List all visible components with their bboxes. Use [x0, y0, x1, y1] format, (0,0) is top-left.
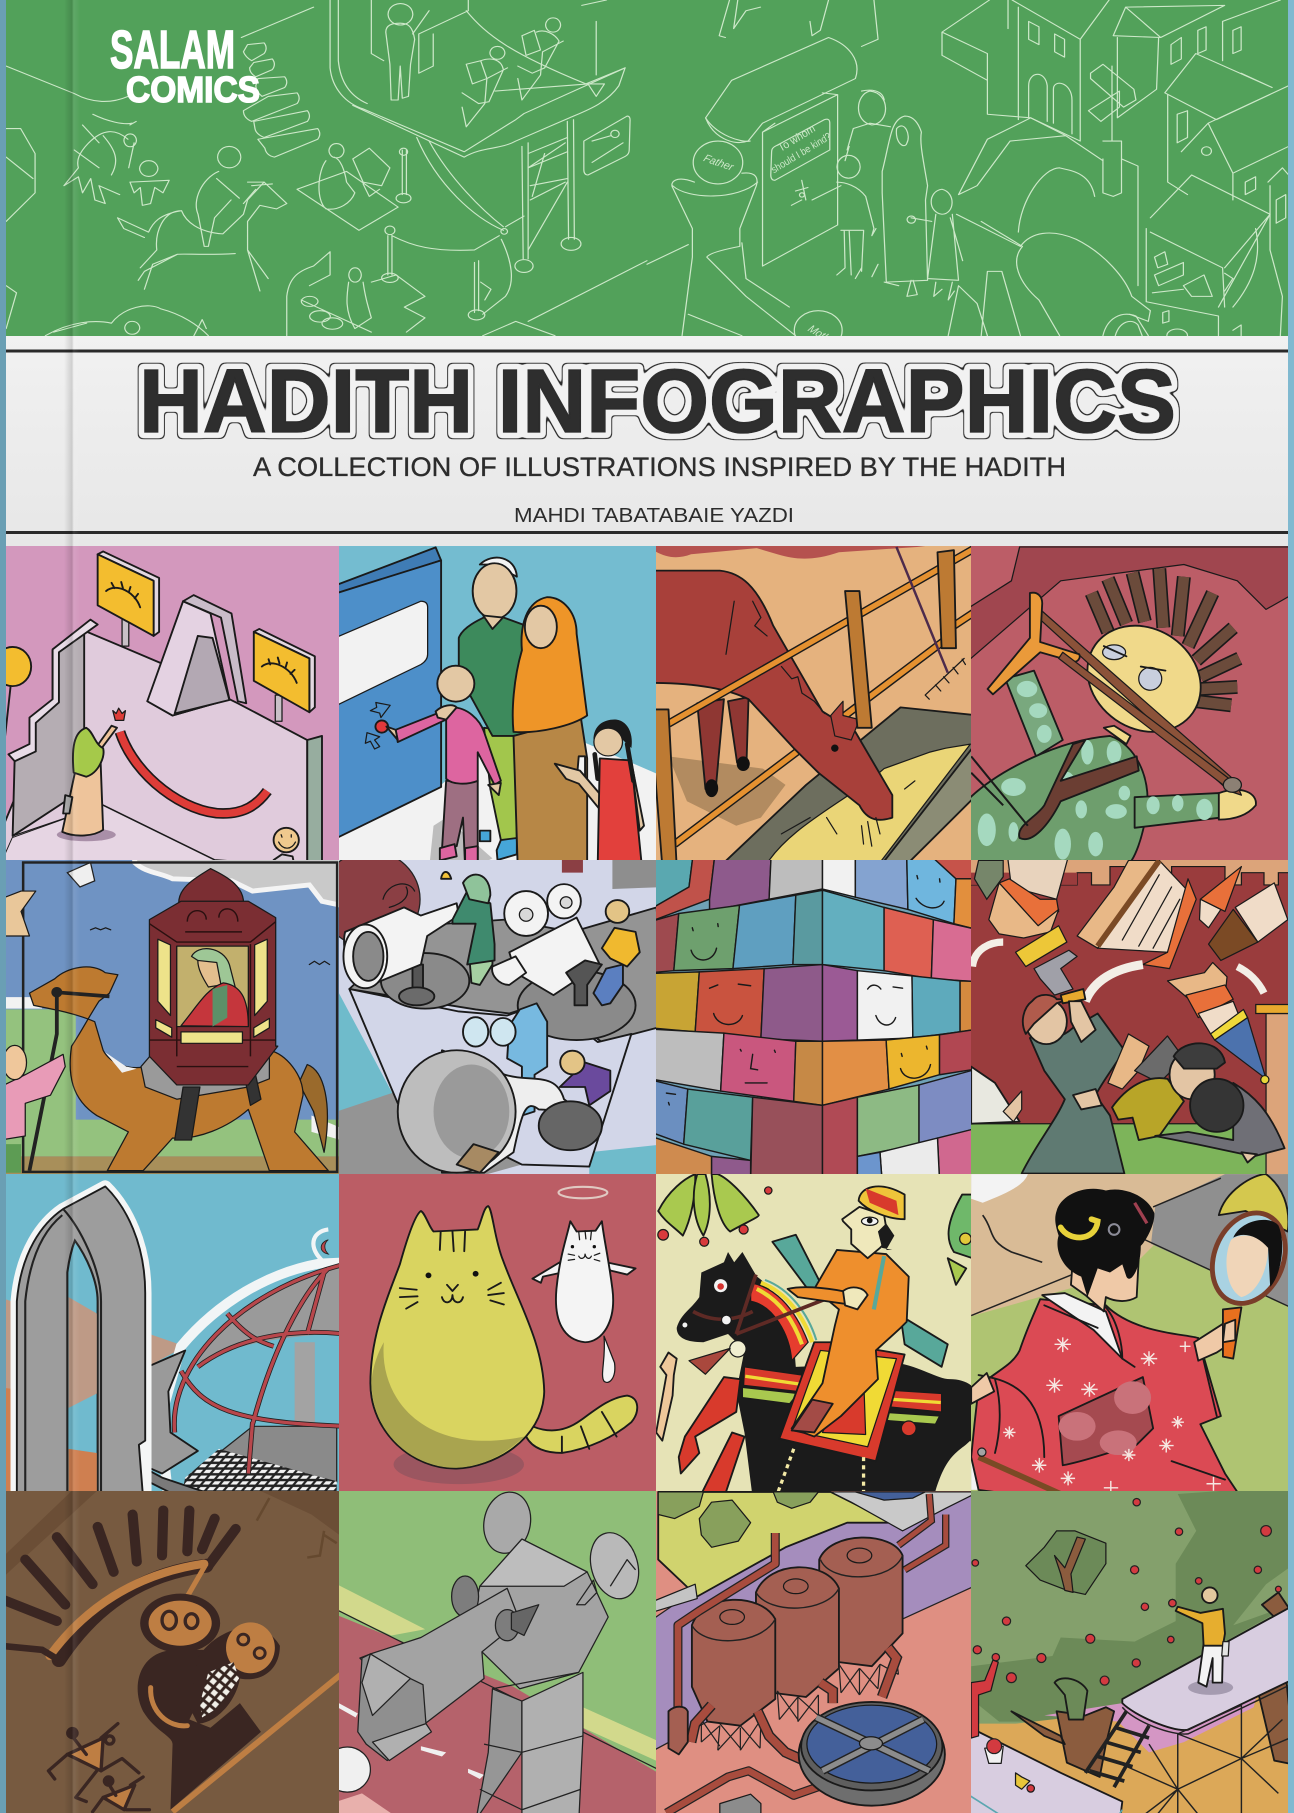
picker man: [1169, 1587, 1233, 1695]
line art: desk person: [287, 252, 371, 336]
subtitle: A COLLECTION OF ILLUSTRATIONS INSPIRED BY THE HADITH: [253, 452, 1066, 482]
panel: woman in kimono with mirror (row 3, col 4): [966, 1170, 1294, 1498]
line art: family: [845, 90, 928, 282]
line art: capsule box: [706, 37, 857, 143]
right column: [1266, 1014, 1294, 1181]
right wall edge: [307, 736, 322, 867]
mother figure: [138, 1594, 261, 1810]
ground: [966, 1683, 1294, 1813]
panel: yellow cat and angel cat (row 3, col 2): [337, 1170, 665, 1498]
mirror: [1196, 1174, 1294, 1359]
book background right: [1288, 0, 1294, 1813]
dome: [160, 1229, 349, 1498]
woman with ribbon: [57, 726, 117, 841]
panel: tanks and pipes (row 4, col 3): [650, 1486, 979, 1813]
falling tower centre: [1077, 860, 1196, 969]
line art: bridge: [956, 118, 1150, 336]
line art: horse and rider: [118, 146, 287, 291]
panel: green line-art header: [6, 0, 1289, 350]
film camera: [492, 884, 602, 1005]
apples: [972, 1498, 1281, 1685]
logo: Salam Comics: [110, 20, 260, 110]
smiling head: [274, 828, 299, 867]
telescope: [343, 903, 459, 1005]
saddle cloth and straps: [141, 1054, 269, 1140]
rake: [896, 547, 965, 699]
panel: wall of smiling bricks (row 2, col 3): [650, 854, 979, 1181]
sphere: father: [693, 141, 743, 184]
door: [337, 547, 441, 838]
panel: gray robot (row 4, col 2): [324, 1486, 665, 1813]
mother: [513, 597, 587, 867]
tank 1: [692, 1600, 775, 1726]
boy in pink: [386, 666, 501, 867]
body: [966, 736, 1256, 867]
teal man: [1022, 989, 1124, 1174]
book background left: [0, 0, 6, 1813]
horse: [650, 571, 892, 846]
line art: left half scene: [6, 0, 647, 336]
kimono: [971, 1293, 1241, 1498]
frame: [23, 862, 337, 1172]
fence lower rail: [675, 609, 979, 844]
headdress arc: [0, 1564, 206, 1660]
bucket and chick: [985, 1739, 1034, 1792]
darker tree canopy: [971, 1486, 1294, 1722]
brick faces: [666, 876, 944, 1105]
line art: right half scene: [647, 0, 1289, 350]
clouds: [135, 854, 341, 905]
panel: boy with slingshot (row 1, col 4): [966, 540, 1294, 867]
seated figure in yellow: [593, 900, 640, 1005]
line art: figure at screen: [297, 144, 398, 230]
bridle: [689, 1275, 841, 1374]
bricks behind: [1108, 1034, 1149, 1089]
label: mother: Mother: [805, 323, 841, 350]
feed trough: [720, 707, 979, 867]
ground: [966, 1124, 1294, 1181]
button with arrows: [365, 702, 390, 749]
green lawn: [658, 1492, 892, 1597]
side hand: [656, 1352, 677, 1441]
label: sign question second line: should I be kind?: [769, 131, 835, 176]
purple figure: [560, 1051, 610, 1105]
panel: arch and dome (row 3, col 1): [0, 1170, 349, 1498]
boy hair spikes: [1092, 569, 1239, 705]
cat tail: [526, 1396, 637, 1453]
panel: apple tree and platforms (row 4, col 4): [966, 1486, 1294, 1813]
panel: Rajput rider on black horse (row 3, col 3): [650, 1170, 979, 1498]
label: sign question: To whom: [775, 123, 818, 154]
falling tower left: [989, 854, 1077, 995]
raised arm: [1005, 671, 1063, 756]
line art: scaffold: [522, 120, 574, 259]
sign: closed eye left: [98, 551, 159, 646]
slingshot: [971, 593, 1241, 826]
man: [459, 558, 526, 860]
left person in background: [0, 891, 36, 936]
woman in howdah: [181, 949, 248, 1027]
saddle: [742, 1342, 942, 1461]
arm and hand: [1194, 1322, 1235, 1361]
howdah: [149, 869, 278, 1085]
panel: family pressing button (row 1, col 2): [337, 540, 673, 867]
line art: standing person top: [371, 0, 468, 100]
red figure: [971, 1660, 998, 1738]
tank 2: [756, 1567, 839, 1697]
gray platforms: [349, 907, 665, 1042]
trunk: [1011, 1592, 1294, 1777]
dancing figures: [48, 1724, 149, 1812]
decorated front leg: [679, 1377, 744, 1498]
quiver: [772, 1235, 948, 1367]
line art: curtain rope: [392, 137, 524, 314]
book spine shading: [64, 0, 80, 1813]
line art: seated readers: [462, 18, 563, 127]
panel: crumbling towers and figures (row 2, col 4): [966, 854, 1294, 1181]
obi sash: [1059, 1377, 1153, 1465]
panel: machines and figures (row 2, col 2): [321, 851, 665, 1181]
floor: [51, 1350, 202, 1498]
line art: houses right: [1165, 54, 1289, 200]
horn: [398, 1050, 602, 1173]
panel: cave painting figures (row 4, col 1): [0, 1490, 345, 1813]
left platform: [650, 1584, 697, 1613]
balloon: [6, 646, 32, 736]
panel: horse at fence (row 1, col 3): [650, 540, 979, 867]
tower piece right: [1167, 962, 1269, 1084]
robot: [358, 1488, 646, 1813]
halo: [559, 1187, 607, 1198]
leaves: [658, 1174, 772, 1246]
right plant: [949, 1195, 979, 1260]
letter-shaped wall arch: [147, 595, 246, 716]
title: HADITH INFOGRAPHICS: [139, 352, 1176, 452]
girl in red: [555, 720, 644, 867]
author: MAHDI TABATABAIE YAZDI: [514, 504, 794, 527]
diagonal ledge: [173, 1674, 341, 1812]
platforms: [966, 1605, 1294, 1813]
line art: bottom animal: [45, 306, 208, 336]
grass: [0, 1009, 345, 1156]
line art: tribal birds: [64, 114, 136, 204]
leader figure: [0, 1045, 65, 1173]
panel: woman on camel in howdah (row 2, col 1): [0, 854, 345, 1181]
line art: houses: [942, 0, 1109, 141]
logo: Salam Comics: COMICS: [126, 69, 260, 110]
round blue basin: [799, 1702, 945, 1806]
logo: Salam Comics: SALAM: [110, 20, 235, 80]
crescent finial: [313, 1229, 328, 1262]
panel: title band: [6, 336, 1288, 546]
angel cat: [532, 1221, 636, 1382]
red ribbon: [113, 708, 267, 813]
yellow cat: [370, 1206, 617, 1469]
tank legs: [701, 1658, 898, 1750]
black horse: [677, 1252, 979, 1498]
woman at telescope: [441, 872, 495, 985]
fence upper rail and posts: [650, 546, 979, 867]
kimono flowers: [1003, 1337, 1221, 1493]
baby figure: [189, 1622, 280, 1724]
sign: closed eye right: [254, 629, 315, 721]
headdress rays: [0, 1510, 236, 1621]
boy face: [1067, 604, 1222, 754]
red pipes: [666, 1533, 896, 1813]
falling roof top right: [1200, 867, 1288, 960]
pipes top: [898, 1494, 946, 1570]
bricks: [650, 854, 979, 1181]
label: father: Father: [701, 152, 736, 174]
figures on right: [1112, 1043, 1285, 1163]
ladder: [1085, 1711, 1149, 1787]
mane: [751, 1283, 808, 1361]
stirrup straps: [777, 1449, 794, 1494]
camel: [29, 967, 328, 1171]
tank 3: [819, 1538, 903, 1666]
panel: wall with ribbon (row 1, col 1): [0, 540, 345, 867]
reels and blue part: [463, 1003, 547, 1116]
gothic arch: [17, 1186, 145, 1498]
pump block: [668, 1707, 688, 1754]
small background tree: [1026, 1531, 1106, 1594]
hair: [1055, 1189, 1154, 1311]
rider: [788, 1186, 909, 1437]
